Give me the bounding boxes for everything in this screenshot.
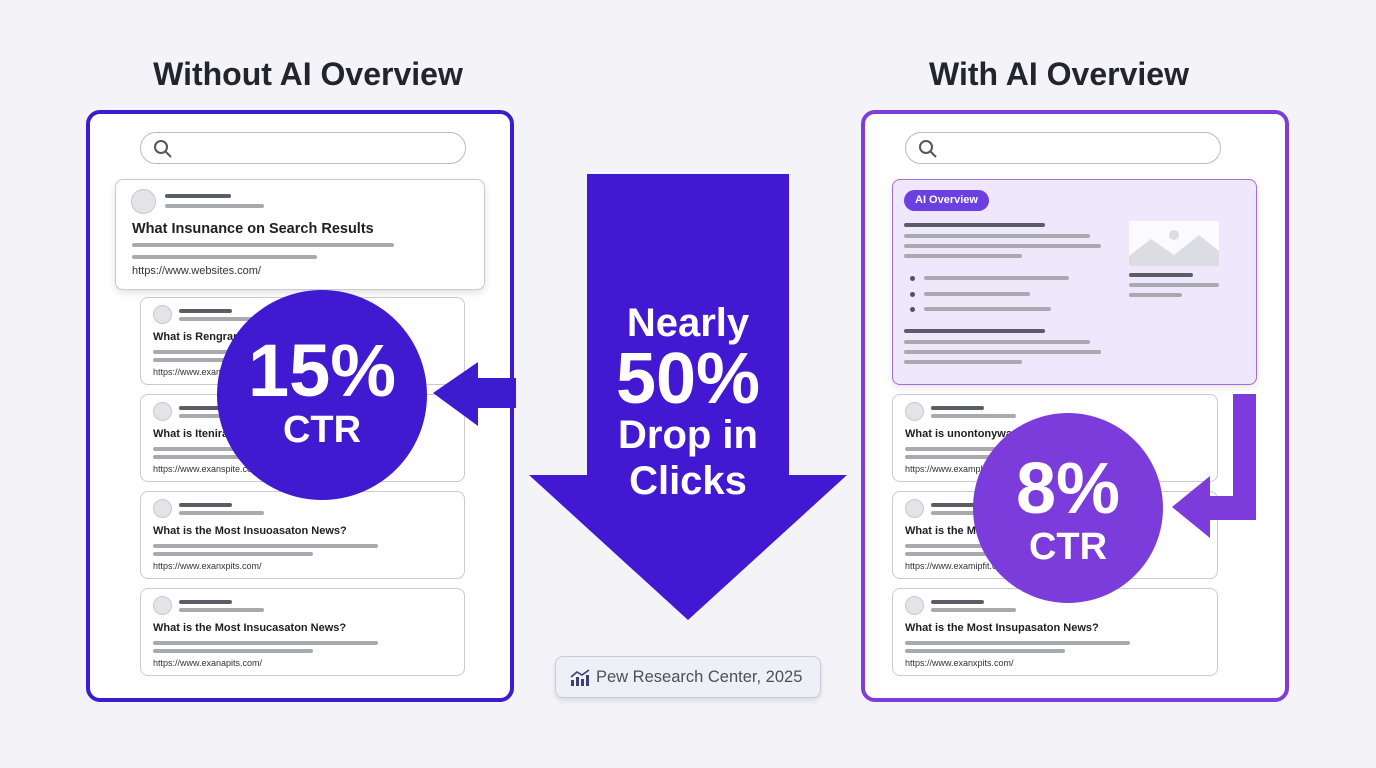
result card 4 bbox=[140, 491, 465, 579]
circle: 15% CTR: CTR bbox=[283, 409, 361, 451]
arrow: left pointing to 15% bbox=[433, 362, 516, 426]
result card 5: https://www.exanapits.com/ bbox=[153, 658, 262, 668]
circle: 8% CTR bbox=[973, 413, 1163, 603]
drop text bbox=[616, 301, 760, 503]
title: with: With AI Overview bbox=[929, 56, 1189, 92]
result card 3: What is the Most Insupasaton News? bbox=[905, 622, 1099, 634]
top result card: What Insunance on Search Results bbox=[132, 221, 374, 237]
AI overview box bbox=[892, 179, 1257, 385]
drop text: Drop in bbox=[618, 413, 758, 457]
drop text: Clicks bbox=[629, 459, 747, 503]
circle: 8% CTR: 8% bbox=[1016, 449, 1120, 529]
result card 2: https://www.examipfit.com/ bbox=[905, 561, 1012, 571]
result card 1: https://www.example.com/ bbox=[905, 464, 1010, 474]
result card 2: What is the Most bbox=[905, 525, 992, 537]
result card 1: What is unontonyway bbox=[905, 428, 1018, 440]
drop text: Nearly bbox=[627, 301, 749, 345]
top result card: https://www.websites.com/ bbox=[132, 265, 261, 277]
top result card bbox=[115, 179, 485, 290]
panel: with AI overview bbox=[861, 110, 1289, 702]
search bar bbox=[905, 132, 1221, 164]
icon: chart bbox=[570, 669, 590, 686]
arrow: central down arrow with drop text bbox=[529, 174, 847, 620]
result card 3: https://www.exanspite.com/ bbox=[153, 464, 262, 474]
title: without: Without AI Overview bbox=[153, 56, 463, 92]
circle: 8% CTR: CTR bbox=[1029, 526, 1107, 568]
source badge bbox=[555, 656, 821, 698]
circle: 15% CTR bbox=[217, 290, 427, 500]
AI overview badge bbox=[904, 190, 989, 211]
arrow: right elbow pointing to 8% bbox=[1172, 394, 1256, 538]
result card 2: https://www.example.com/ bbox=[153, 367, 258, 377]
image placeholder bbox=[1129, 221, 1219, 266]
AI overview badge: AI Overview bbox=[915, 194, 978, 206]
result card 5: What is the Most Insucasaton News? bbox=[153, 622, 346, 634]
result card 3: https://www.exanxpits.com/ bbox=[905, 658, 1014, 668]
drop text: 50% bbox=[616, 339, 760, 419]
result card 3 bbox=[892, 588, 1218, 676]
result card 2 bbox=[892, 491, 1218, 579]
source badge: Pew Research Center, 2025 bbox=[596, 668, 802, 686]
search bar bbox=[140, 132, 466, 164]
result card 1 bbox=[892, 394, 1218, 482]
result card 2 bbox=[140, 297, 465, 385]
result card 4: https://www.exanxpits.com/ bbox=[153, 561, 262, 571]
result card 5 bbox=[140, 588, 465, 676]
panel: without AI overview bbox=[86, 110, 514, 702]
circle: 15% CTR: 15% bbox=[248, 329, 396, 412]
result card 3 bbox=[140, 394, 465, 482]
result card 3: What is Itenirary bbox=[153, 428, 239, 440]
result card 4: What is the Most Insuoasaton News? bbox=[153, 525, 347, 537]
result card 2: What is Rengraph bbox=[153, 331, 247, 343]
